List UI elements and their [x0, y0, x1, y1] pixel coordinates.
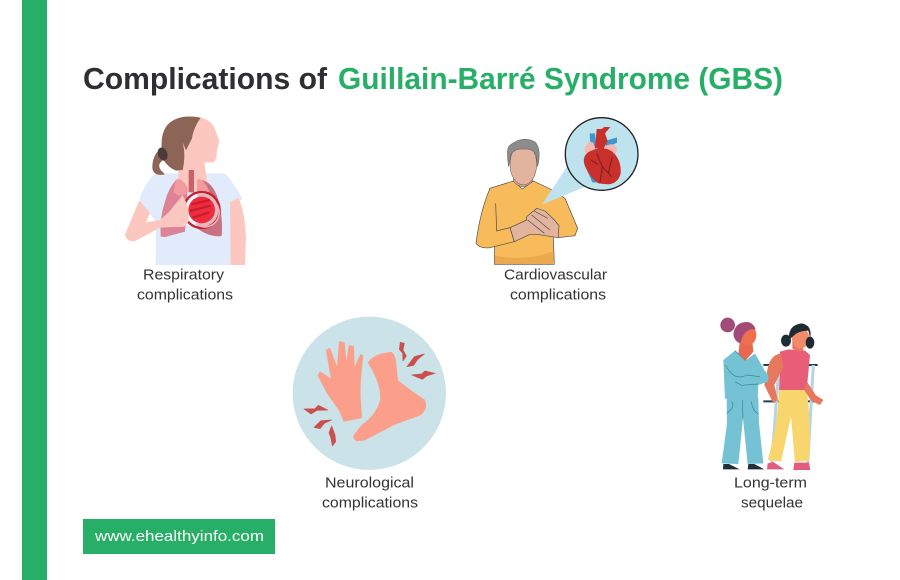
label: long-term sequelae: Long-term [734, 474, 807, 492]
title: Complications of [83, 61, 328, 96]
label: long-term sequelae [734, 474, 807, 512]
label: cardiovascular: complications [510, 286, 606, 304]
patient legs [768, 389, 810, 462]
nurse legs [722, 397, 763, 464]
title [83, 61, 783, 96]
label: respiratory [137, 266, 233, 304]
nurse head [738, 340, 753, 361]
label: neurological: complications [322, 494, 418, 512]
label: neurological [322, 474, 418, 512]
green side bar [22, 0, 47, 580]
label: long-term sequelae: sequelae [741, 494, 803, 512]
label: cardiovascular [504, 266, 607, 304]
icon: man with heart [476, 118, 638, 264]
website badge [83, 519, 275, 554]
label: neurological: Neurological [325, 474, 414, 492]
website badge: www.ehealthyinfo.com [94, 528, 264, 545]
patient head [792, 338, 803, 351]
icon: nurse helping patient on crutches [720, 318, 823, 470]
title: Guillain-Barré Syndrome (GBS) [338, 61, 783, 96]
label: respiratory: Respiratory [143, 266, 225, 284]
crutches [763, 365, 818, 401]
label: respiratory: complications [137, 286, 233, 304]
nurse torso [723, 351, 768, 399]
patient arms [804, 382, 823, 405]
icon: woman with lungs [125, 116, 246, 265]
label: cardiovascular: Cardiovascular [504, 266, 607, 284]
icon: hand and foot with nerve pain [293, 317, 446, 470]
patient torso [779, 349, 810, 390]
